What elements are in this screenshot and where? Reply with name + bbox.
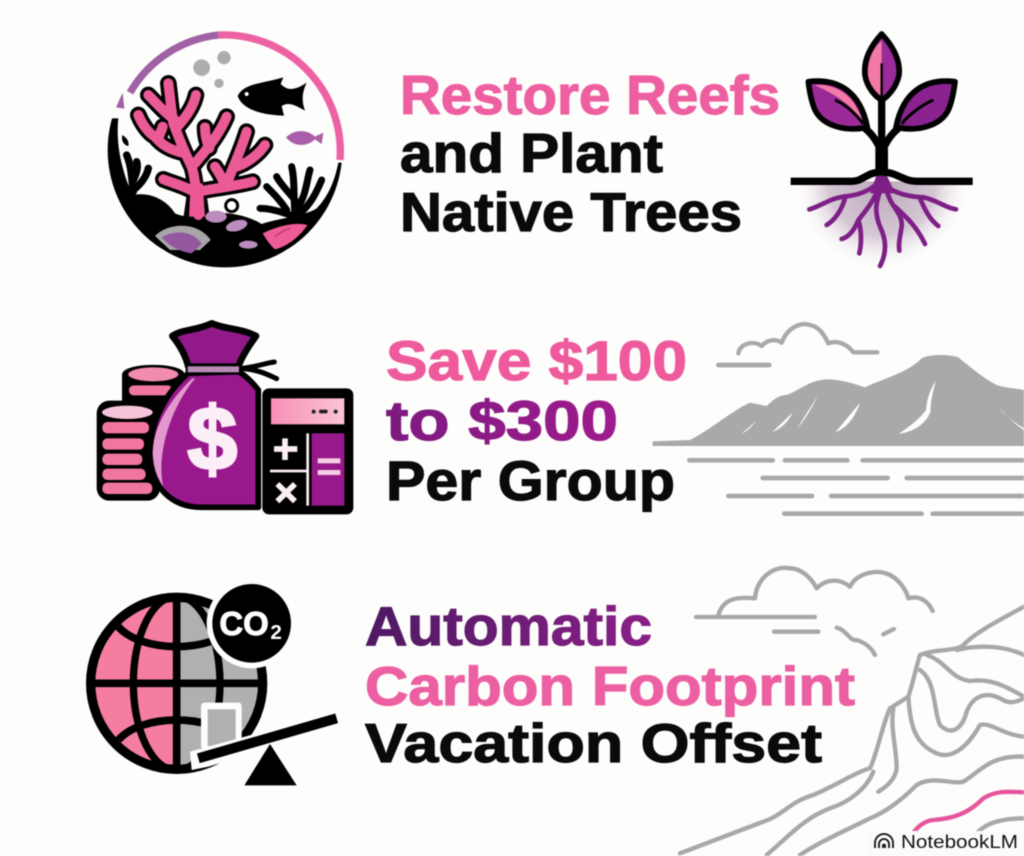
illustration: outlined mountains and clouds (680, 568, 1024, 855)
watermark: NotebookLM (868, 831, 1024, 856)
heading: restore reefs (400, 64, 780, 243)
illustration: island mountains and water (653, 324, 1024, 514)
heading: save $100 to $300 (386, 329, 687, 512)
bag neck (172, 323, 256, 367)
heading: save $100 to $300: to $300 (386, 389, 618, 452)
seesaw (190, 712, 340, 770)
icon: globe with CO2 and seesaw (88, 578, 340, 785)
panel: carbon offset (88, 568, 1024, 855)
black fish (238, 77, 307, 116)
icon: seedling with roots (791, 34, 973, 267)
heading: restore reefs: and Plant (400, 122, 663, 184)
calculator (262, 388, 353, 514)
heading: automatic carbon footprint vacation offset: Carbon Footprint (365, 655, 855, 717)
panel: save money (97, 323, 1024, 514)
rocks (155, 226, 211, 250)
heading: restore reefs: Native Trees (400, 181, 742, 243)
heading: save $100 to $300: Save $100 (386, 329, 687, 392)
icon: globe with CO2 and seesaw: 2 (270, 621, 282, 644)
right leaf (896, 81, 955, 129)
front coins (97, 401, 160, 501)
CO2 badge (207, 578, 297, 668)
watermark: NotebookLM: NotebookLM (901, 832, 1018, 852)
dollar sign: $ (187, 388, 237, 488)
coral: small right black (260, 167, 322, 215)
coral: small left black (127, 155, 148, 192)
heading: save $100 to $300: Per Group (386, 449, 675, 512)
bubbles (193, 59, 210, 76)
back coins (123, 366, 183, 407)
heading: automatic carbon footprint vacation offset (365, 595, 855, 774)
purple fish (286, 131, 323, 145)
bag ties (242, 362, 277, 379)
heading: restore reefs: Restore Reefs (400, 64, 780, 126)
panel: restore reefs (103, 34, 973, 273)
icon: money bag, coins and calculator (97, 323, 353, 514)
heading: automatic carbon footprint vacation offset: Vacation Offset (365, 712, 822, 774)
heading: automatic carbon footprint vacation offset: Automatic (365, 595, 652, 657)
offset block (201, 703, 242, 749)
left leaf (808, 81, 867, 129)
top leaf (865, 34, 899, 100)
bag body (150, 372, 258, 507)
icon: coral reef circle (103, 35, 347, 273)
icon: globe with CO2 and seesaw: CO (219, 606, 269, 643)
coral: main pink (138, 83, 265, 215)
